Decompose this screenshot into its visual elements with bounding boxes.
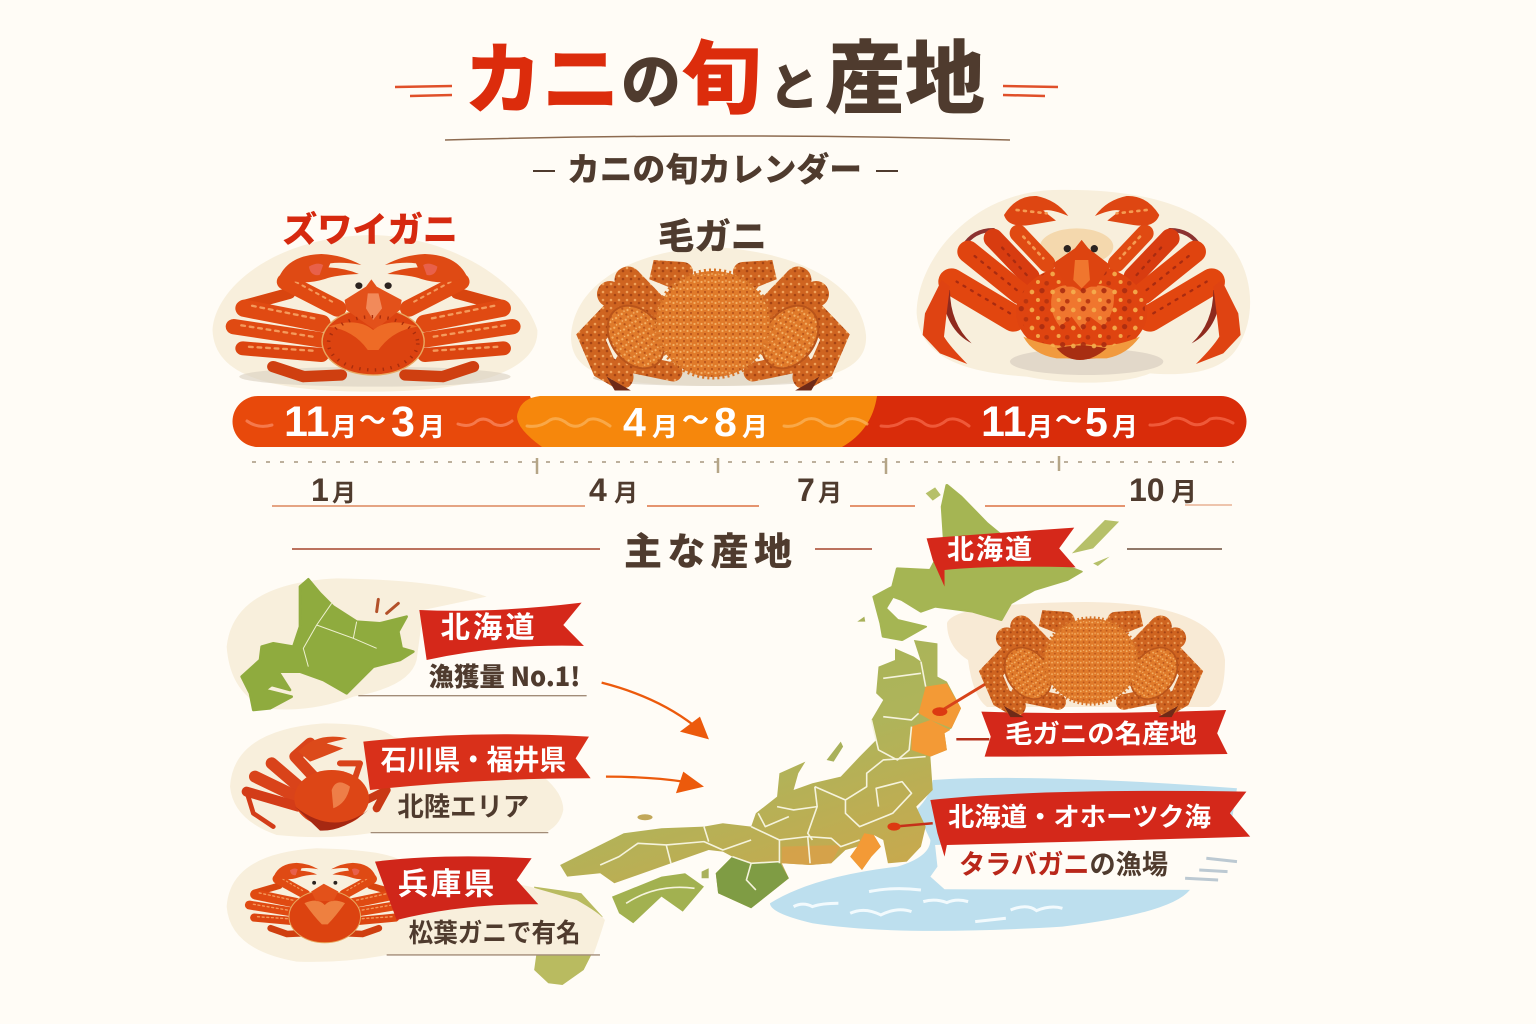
season bar: 3 xyxy=(391,398,415,446)
ribbon: Ishikawa and Fukui: 石川県・福井県 xyxy=(381,738,566,778)
ribbon: Hokkaido map label xyxy=(927,528,1076,587)
label: famous hairy crab region: 毛ガニの名産地 xyxy=(1005,714,1197,751)
blob: hairy crab callout xyxy=(947,602,1225,707)
season bar: 4 xyxy=(623,399,646,445)
arrow: Hokuriku to map xyxy=(606,772,704,793)
Kii green xyxy=(716,857,789,908)
heading: snow crab: ズワイガニ xyxy=(282,202,458,253)
prefecture borders xyxy=(600,662,926,903)
label: Hokkaido on map: 北海道 xyxy=(947,528,1032,567)
icon: crab xyxy=(247,737,387,831)
season bar: ～ xyxy=(682,399,709,438)
season bar: 月 xyxy=(1027,407,1053,444)
orange prefectures xyxy=(850,683,961,870)
panel: Hyogo xyxy=(227,848,605,962)
timeline xyxy=(252,456,1234,509)
ribbon: Okhotsk xyxy=(930,791,1250,857)
subtitle: calendar: カニの旬カレンダー xyxy=(567,143,862,191)
text: famous for Matsuba crab: 松葉ガニで有名 xyxy=(409,913,581,950)
season bar: 月 xyxy=(331,407,357,444)
crab: king crab xyxy=(917,190,1250,383)
timeline: 月 xyxy=(818,473,842,508)
heading: hairy crab: 毛ガニ xyxy=(658,208,767,260)
blob: Hokuriku xyxy=(230,723,563,837)
Kyushu xyxy=(534,887,603,985)
season bar: ～ xyxy=(1055,399,1082,438)
icon: Hokkaido map xyxy=(242,579,413,710)
ribbon: Hokkaido: 北海道 xyxy=(441,605,535,647)
timeline: 7 xyxy=(797,472,815,508)
leader line: Iwate xyxy=(932,682,989,716)
text: Hokuriku area: 北陸エリア xyxy=(397,785,529,824)
blob: Hokkaido xyxy=(227,578,487,709)
title xyxy=(395,15,1058,140)
label: Hokkaido Okhotsk Sea: 北海道・オホーツク海 xyxy=(948,797,1211,834)
timeline: 月 xyxy=(332,473,356,508)
map: Japan xyxy=(534,485,1119,985)
season bar: 月 xyxy=(419,407,445,444)
map callouts xyxy=(887,528,1250,857)
season bar: ～ xyxy=(359,399,386,438)
timeline: 4 xyxy=(589,472,607,508)
season bar xyxy=(232,396,1246,447)
timeline: 10 xyxy=(1129,472,1165,508)
timeline: 月 xyxy=(1171,472,1197,509)
ribbon: hairy crab xyxy=(956,710,1228,757)
crab: snow crab xyxy=(212,235,537,392)
label: king crab fishing grounds: タラバガニの漁場 xyxy=(959,843,1168,882)
title: 産地 xyxy=(825,15,985,131)
panel: Hokkaido xyxy=(227,578,587,710)
title: の xyxy=(621,34,681,121)
Hokkaido xyxy=(874,485,1081,640)
text: catch No.1: 漁獲量 No.1! xyxy=(429,657,580,694)
Kuril islands xyxy=(926,487,1119,566)
Shikoku xyxy=(612,873,704,923)
ribbon: Hyogo xyxy=(375,856,538,920)
blob: Hyogo xyxy=(227,848,605,962)
Honshu xyxy=(560,640,961,908)
panel: Ishikawa and Fukui xyxy=(230,723,591,837)
crab: hairy crab xyxy=(571,247,866,390)
season bar: 月 xyxy=(652,407,678,444)
title: 旬 xyxy=(681,15,761,131)
season bar: 月 xyxy=(742,407,768,444)
crab: hairy crab callout xyxy=(991,618,1191,717)
season bar: 11 xyxy=(284,398,329,446)
map: sea xyxy=(770,778,1256,931)
islands xyxy=(637,814,653,820)
season bar: 11 xyxy=(981,398,1026,446)
title: カニ xyxy=(464,18,620,130)
timeline: 月 xyxy=(614,473,638,508)
ribbon: Hokkaido xyxy=(419,603,584,660)
heading: main producing regions: 主な産地 xyxy=(624,521,792,576)
title: と xyxy=(769,48,819,120)
ribbon: Hyogo: 兵庫県 xyxy=(398,858,494,903)
southern tint xyxy=(782,845,841,865)
season bar: 5 xyxy=(1085,399,1108,445)
icon: crab xyxy=(249,863,400,943)
leader line: Kanto xyxy=(887,823,933,831)
arrow: Hokkaido to map xyxy=(602,683,709,739)
timeline: 1 xyxy=(311,472,329,508)
season bar: 月 xyxy=(1112,407,1138,444)
season bar: 8 xyxy=(714,399,737,445)
ribbon: Ishikawa and Fukui xyxy=(363,734,591,790)
